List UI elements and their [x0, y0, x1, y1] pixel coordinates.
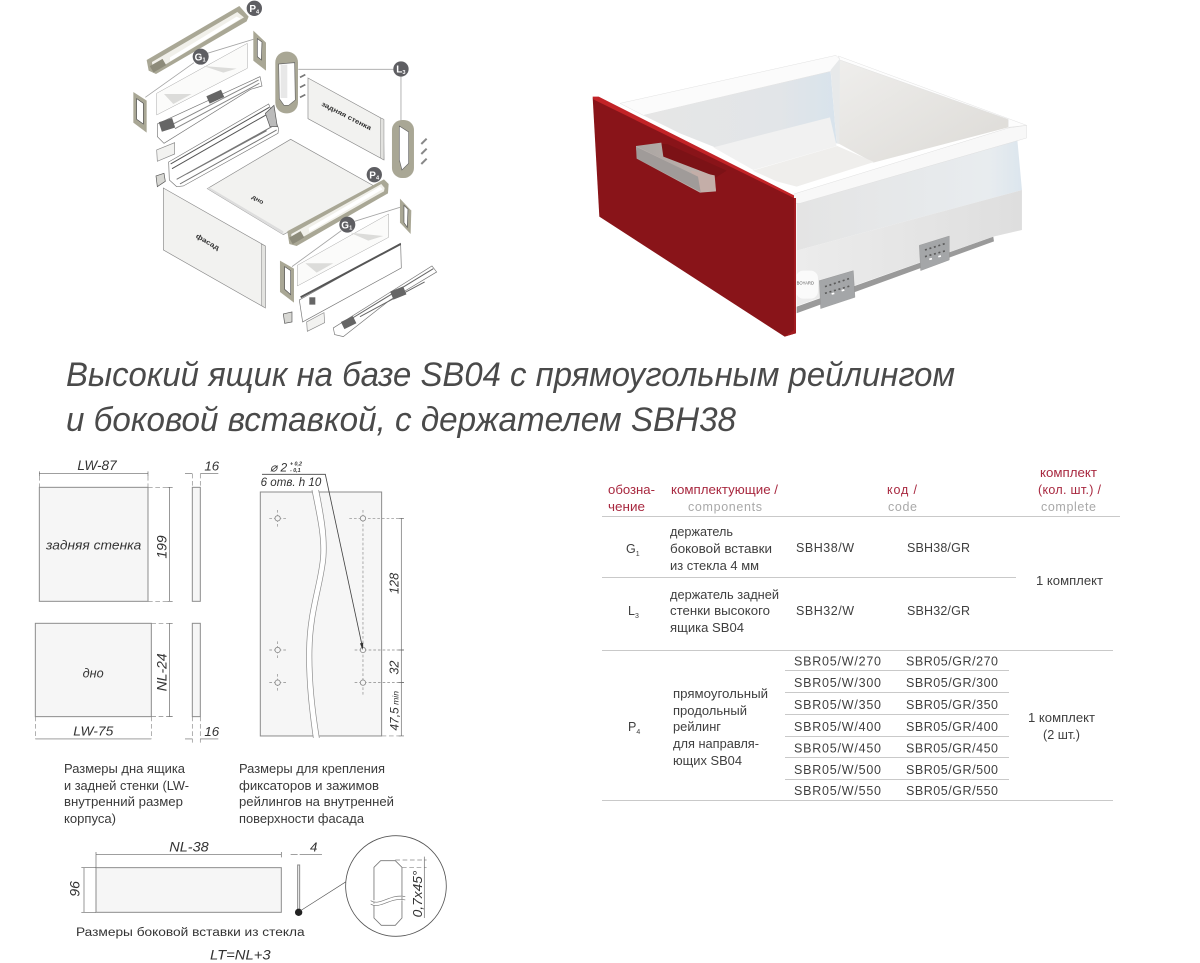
row P4: SBR05/GR/500: [906, 763, 998, 777]
row P4: [628, 654, 1095, 798]
rail P4 top: [147, 6, 249, 74]
badge G1 lower: [339, 217, 355, 233]
drawer photo: [593, 55, 1027, 337]
caption: facade drilling: [239, 762, 394, 826]
row G1: боковой вставки: [670, 542, 772, 556]
row L3: SBH32/W: [796, 604, 854, 618]
holder L3 right: [392, 120, 427, 178]
badge P4 top: P: [249, 4, 256, 15]
row L3: ящика SB04: [670, 621, 744, 635]
facade drilling plan: 47,5 min: [388, 691, 402, 731]
row P4: P: [628, 720, 636, 734]
table header: (кол. шт.) /: [1038, 483, 1102, 497]
bottom panel side view: [185, 623, 220, 743]
glass insert drawing: [66, 836, 446, 962]
back wall side view: 16: [204, 459, 220, 474]
panel: facade: [163, 188, 265, 308]
exploded view of drawer: [133, 1, 437, 337]
glass front view: 96: [66, 881, 82, 897]
facade drilling plan: 6 отв. h 10: [261, 475, 322, 489]
row P4: продольный: [673, 704, 747, 718]
dimension drawing: back wall and bottom: [35, 457, 405, 743]
back wall: 199: [154, 535, 170, 559]
row P4: SBR05/GR/400: [906, 720, 998, 734]
glass front view: NL-38: [169, 838, 209, 854]
panel: back wall: задняя стенка: [320, 101, 373, 132]
badge P4 lower: P: [369, 170, 376, 181]
row P4: SBR05/W/270: [794, 654, 881, 668]
detail circle: [346, 836, 446, 936]
title: Высокий ящик на базе SB04 с прямоугольным рейлингом: [66, 356, 955, 394]
holder L3 left: [275, 52, 305, 113]
row P4: SBR05/W/550: [794, 784, 881, 798]
row G1: SBH38/GR: [907, 541, 970, 555]
row P4: 1 комплект: [1028, 711, 1095, 725]
holder G1 top left: [133, 92, 147, 133]
caption: bottom and back wall sizes: Размеры дна ящика: [64, 762, 185, 776]
callout lines G1 lower: [292, 207, 400, 267]
badge P4 lower: [367, 167, 382, 182]
row G1: держатель: [670, 525, 733, 539]
badge G1 lower: 1: [349, 226, 352, 232]
badge G1 top: G: [195, 52, 202, 63]
table rules: [602, 516, 1120, 800]
back wall side view: [185, 459, 220, 601]
drawer side top: [156, 104, 279, 187]
badge L3: [393, 61, 409, 77]
table header: code: [888, 500, 917, 514]
facade drilling plan: ⌀ 2: [270, 460, 288, 474]
handle: [636, 143, 727, 193]
bottom panel: NL-24: [154, 653, 170, 691]
row P4: SBR05/W/350: [794, 698, 881, 712]
bottom panel: [35, 623, 173, 739]
title: и боковой вставкой, с держателем SBH38: [66, 401, 736, 439]
row P4: SBR05/GR/300: [906, 676, 998, 690]
row P4: для направля-: [673, 737, 759, 751]
caption: facade drilling: Размеры для крепления: [239, 762, 385, 776]
badge P4 top: 4: [256, 9, 260, 15]
right side of drawer: BOYARD: [797, 280, 814, 286]
row L3: [628, 588, 970, 635]
merged quantity G1 L3: 1 комплект: [1036, 574, 1103, 588]
back and inner walls: [620, 55, 1027, 187]
red front panel: [593, 97, 796, 337]
holder G1 top right: [253, 31, 266, 71]
row P4: (2 шт.): [1043, 728, 1080, 742]
table of components: [602, 466, 1120, 800]
glass insert lower: [297, 214, 389, 286]
facade drilling plan: + 0,2: [290, 461, 302, 467]
row P4: SBR05/GR/350: [906, 698, 998, 712]
title: [66, 356, 955, 439]
row P4: SBR05/W/450: [794, 742, 881, 756]
caption: facade drilling: поверхности фасада: [239, 812, 364, 826]
glass side view: [291, 839, 347, 916]
runner top: [157, 77, 262, 161]
bottom panel: дно: [83, 666, 104, 680]
table header: комплектующие /: [671, 483, 779, 497]
row P4: SBR05/GR/270: [906, 654, 998, 668]
row L3: 3: [635, 613, 639, 620]
badge L3: L: [396, 65, 402, 76]
panel: facade: фасад: [194, 233, 221, 253]
row P4: 4: [636, 729, 640, 736]
row G1: G: [626, 542, 636, 556]
formula: LT=NL+3: [210, 946, 271, 962]
row P4: рейлинг: [673, 720, 721, 734]
table header: [608, 466, 1102, 514]
runner lower: [333, 266, 437, 337]
badge P4 lower: 4: [376, 176, 380, 182]
table header: чение: [608, 500, 645, 514]
badge G1 top: [193, 49, 209, 65]
badge G1 top: 1: [202, 58, 206, 64]
panel: bottom: дно: [250, 195, 265, 206]
rail P4 lower: [287, 179, 389, 246]
bottom panel: LW-75: [73, 723, 114, 738]
table header: комплект: [1040, 466, 1097, 480]
panel: back wall: [308, 78, 384, 160]
table header: complete: [1041, 500, 1096, 514]
caption: bottom and back wall sizes: корпуса): [64, 812, 116, 826]
row G1: [626, 525, 970, 573]
row L3: держатель задней: [670, 588, 779, 602]
badge P4 top: [247, 1, 262, 16]
panel: bottom: [207, 139, 374, 235]
row P4: SBR05/W/400: [794, 720, 881, 734]
back wall: LW-87: [77, 457, 118, 473]
holder G1 lower left: [280, 261, 294, 303]
detail circle: 0,7x45°: [410, 870, 425, 917]
row P4: SBR05/GR/450: [906, 742, 998, 756]
row G1: из стекла 4 мм: [670, 559, 759, 573]
callout lines L3: [298, 69, 401, 121]
facade drilling plan: - 0,1: [290, 468, 301, 474]
caption: bottom and back wall sizes: [64, 762, 189, 826]
glass front view: [66, 838, 281, 912]
table header: обозна-: [608, 483, 655, 497]
back wall: задняя стенка: [45, 537, 141, 552]
drawer side lower: [283, 243, 401, 331]
badge L3: 3: [402, 70, 406, 76]
callout lines G1 top: [145, 38, 257, 97]
badge G1 lower: G: [341, 220, 349, 231]
row L3: SBH32/GR: [907, 604, 970, 618]
right side of drawer: [794, 125, 1027, 313]
mounting brackets: [819, 236, 949, 309]
row P4: SBR05/W/500: [794, 763, 881, 777]
caption: glass insert: Размеры боковой вставки из стекла: [76, 925, 305, 939]
facade drilling plan: 32: [388, 661, 402, 675]
back wall: [39, 457, 173, 601]
row P4: прямоугольный: [673, 687, 768, 701]
table header: код /: [887, 483, 918, 497]
glass insert top: [157, 43, 247, 115]
facade drilling plan: [260, 460, 405, 738]
holder G1 lower right: [400, 199, 411, 234]
facade drilling plan: 128: [388, 573, 402, 594]
caption: bottom and back wall sizes: и задней стенки (LW-: [64, 779, 189, 793]
caption: facade drilling: фиксаторов и зажимов: [239, 779, 379, 793]
caption: facade drilling: рейлингов на внутренней: [239, 795, 394, 809]
glass side view: 4: [310, 839, 317, 854]
row L3: L: [628, 604, 635, 618]
caption: bottom and back wall sizes: внутренний размер: [64, 795, 183, 809]
row P4: SBR05/W/300: [794, 676, 881, 690]
row G1: 1: [636, 551, 640, 558]
row G1: SBH38/W: [796, 541, 854, 555]
row L3: стенки высокого: [670, 604, 770, 618]
row P4: ющих SB04: [673, 754, 742, 768]
table header: components: [688, 500, 762, 514]
bottom panel side view: 16: [204, 724, 220, 739]
row P4: SBR05/GR/550: [906, 784, 998, 798]
